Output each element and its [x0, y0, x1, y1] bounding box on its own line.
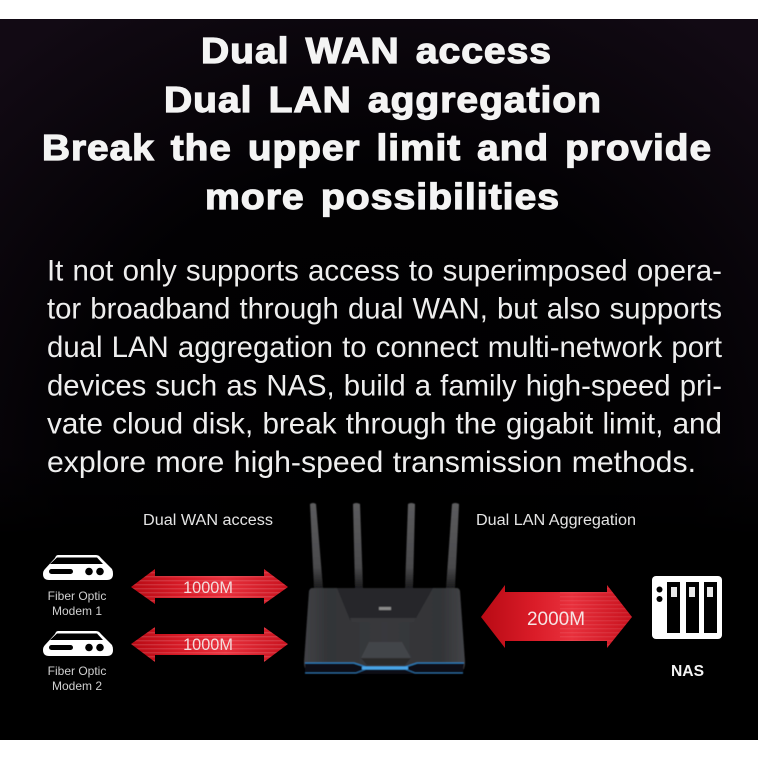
body text [47, 254, 722, 479]
icon: fiber optic modem 2 [43, 631, 113, 656]
label: Dual LAN Aggregation: Dual LAN Aggregation [476, 512, 636, 529]
arrow: 2000M [481, 585, 632, 648]
icon: NAS [652, 576, 722, 639]
label: modem 1: Modem 1 [52, 604, 102, 618]
label: Dual WAN access: Dual WAN access [143, 512, 273, 529]
title [42, 30, 712, 217]
label: modem 2 [48, 664, 106, 693]
logo [379, 607, 391, 610]
arrow: 1000M top: 1000M [183, 579, 233, 597]
arrow: 1000M bottom: 1000M [183, 636, 233, 654]
router body [304, 588, 465, 674]
arrow: 2000M: 2000M [527, 609, 585, 630]
title: Break the upper limit and provide [42, 127, 712, 168]
title: Dual WAN access [201, 30, 552, 71]
label: NAS: NAS [671, 663, 704, 680]
arrow: 1000M bottom [131, 627, 288, 662]
blue LED vents [305, 663, 464, 674]
body text: devices such as NAS, build a family high-speed pri- [47, 370, 722, 402]
body text: dual LAN aggregation to connect multi-network port [47, 331, 722, 364]
router [304, 503, 465, 674]
title: Dual LAN aggregation [164, 79, 602, 120]
front notch [361, 642, 411, 658]
label: modem 1 [48, 589, 106, 618]
title: more possibilities [205, 176, 560, 217]
top recess [337, 588, 433, 620]
arrow: 1000M top [131, 569, 288, 604]
label: modem 1: Fiber Optic [48, 589, 106, 603]
label: modem 2: Modem 2 [52, 679, 102, 693]
antennas [310, 503, 459, 588]
icon: fiber optic modem 1 [43, 555, 113, 580]
label: modem 2: Fiber Optic [48, 664, 106, 678]
body text: explore more high-speed transmission methods. [47, 446, 696, 479]
body text: vate cloud disk, break through the gigabit limit, and [47, 408, 722, 440]
body text: It not only supports access to superimposed opera- [47, 254, 722, 288]
body text: tor broadband through dual WAN, but also supports [47, 292, 722, 326]
